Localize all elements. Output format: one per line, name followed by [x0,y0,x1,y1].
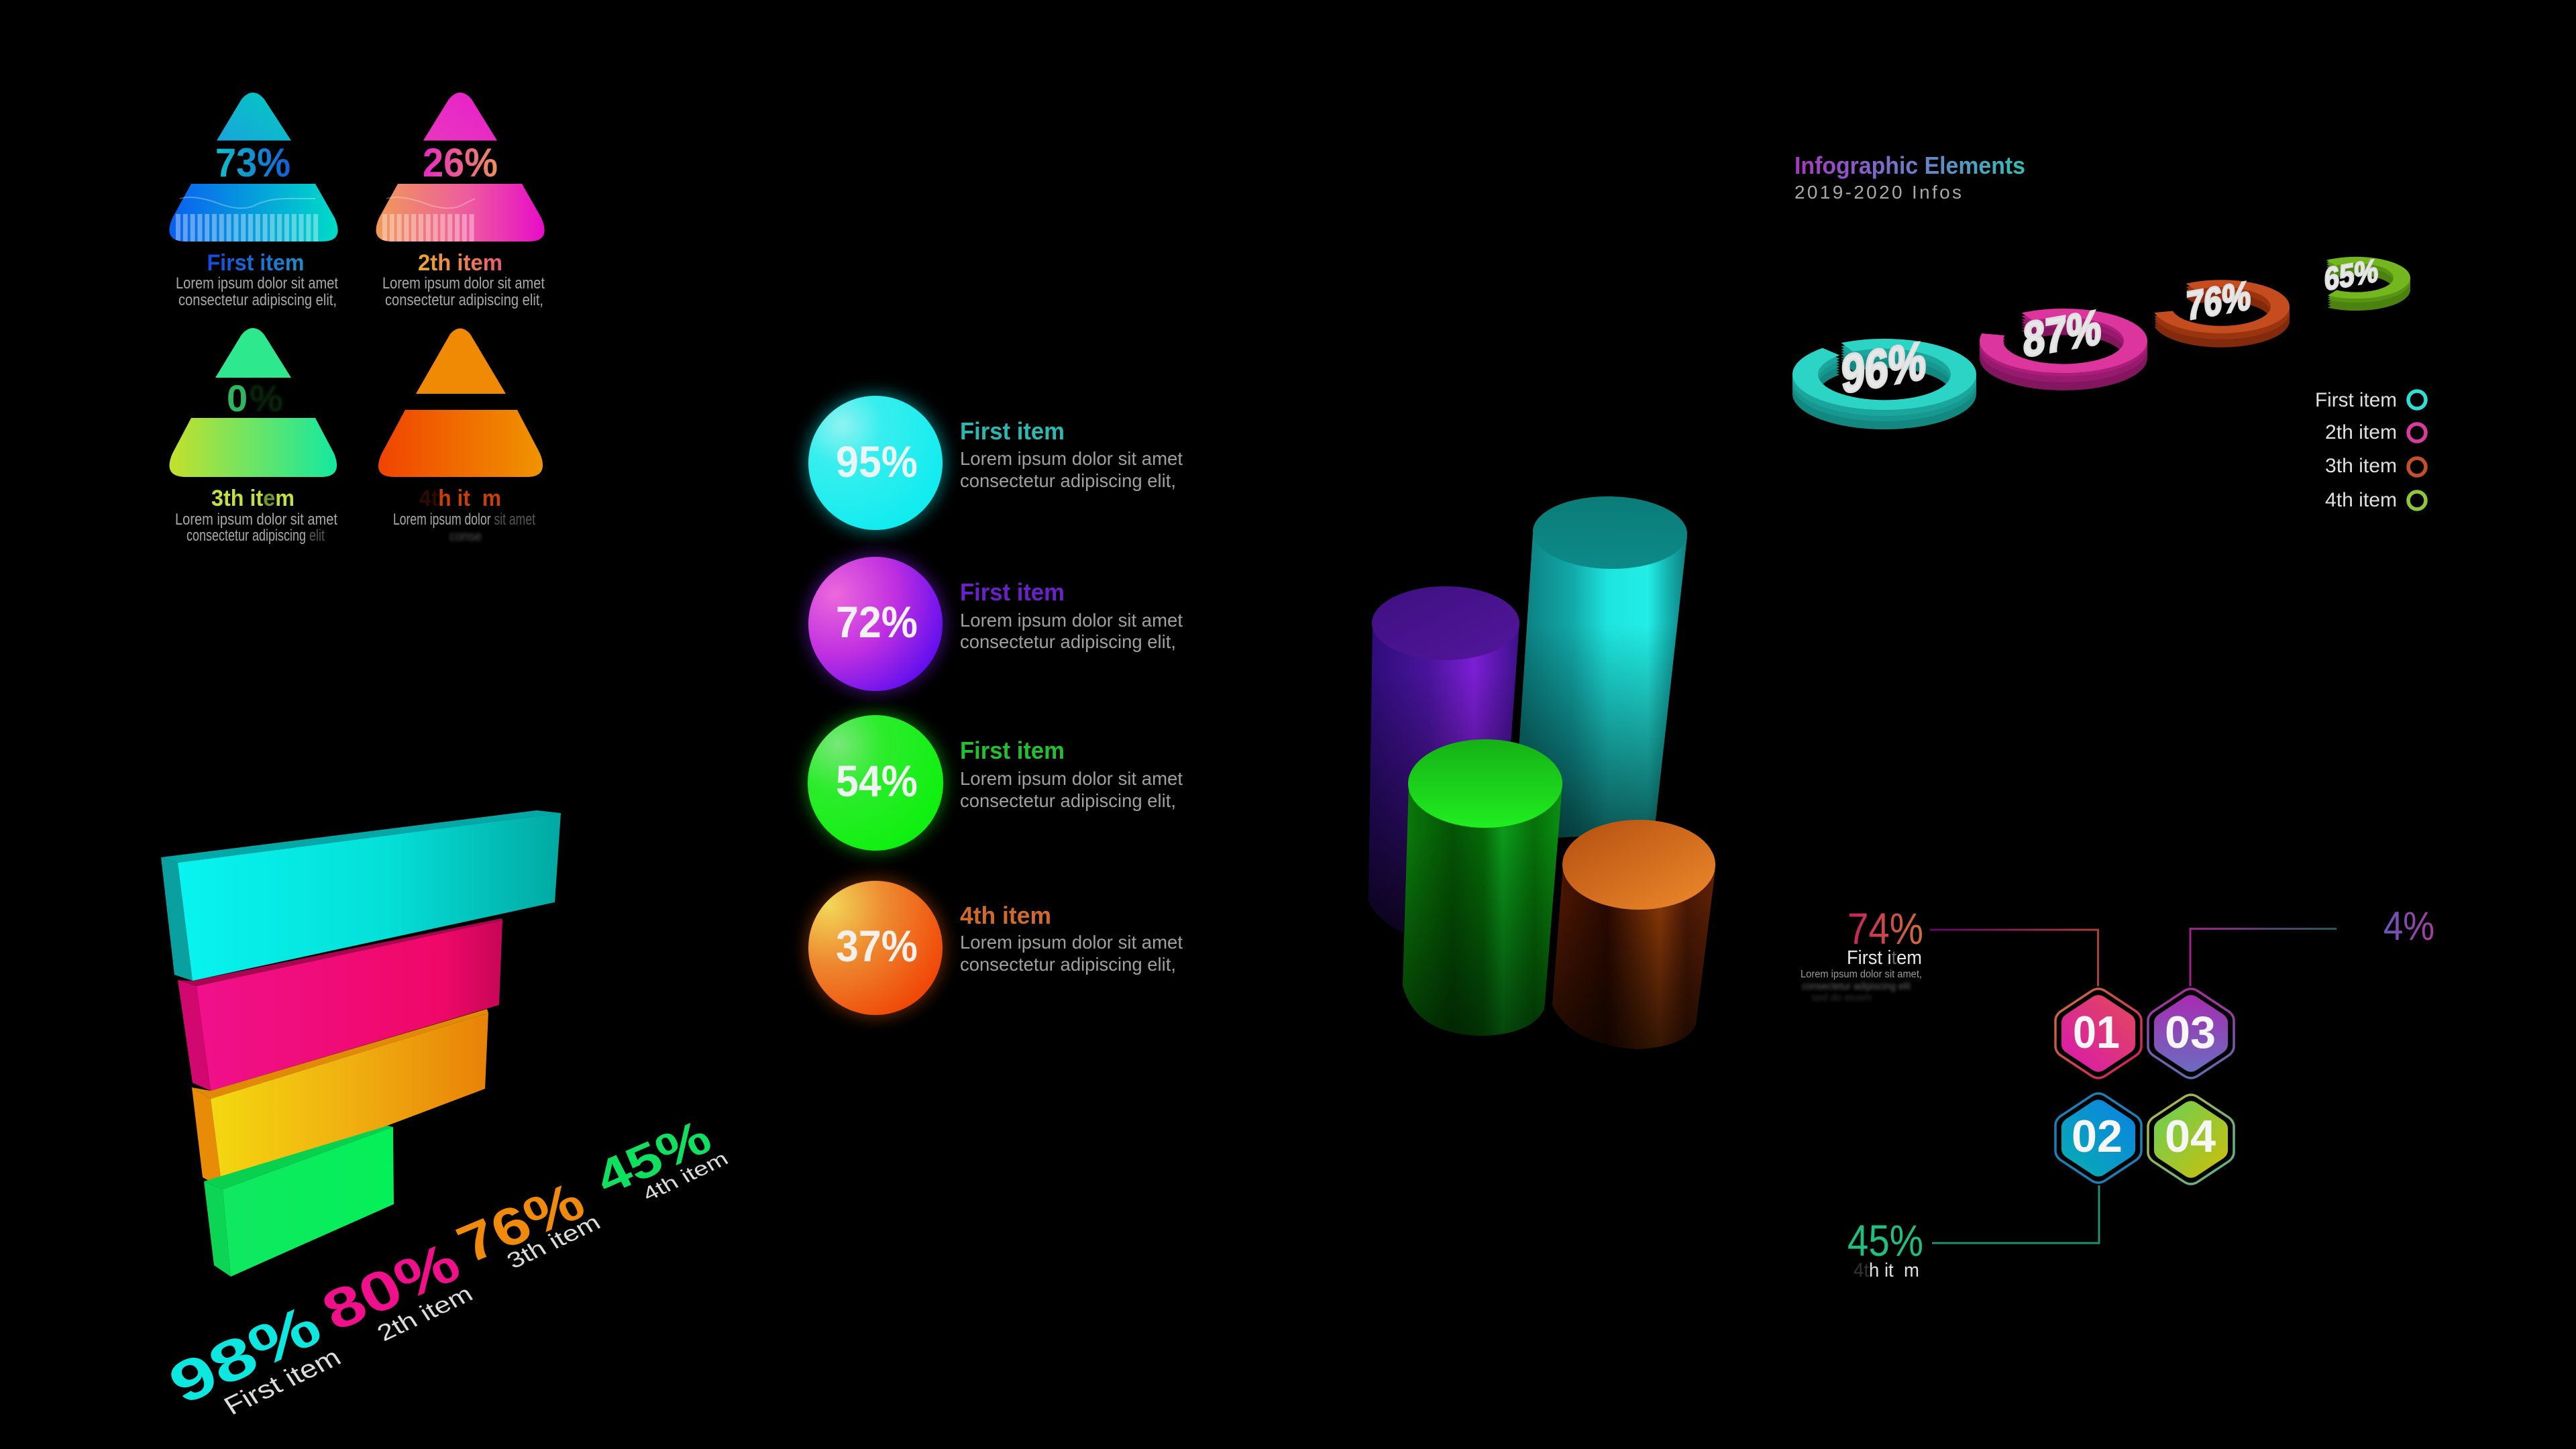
cylinder green [1403,739,1562,1036]
item title: 2th item [418,250,502,276]
ring 76% [2140,272,2302,352]
item description partly faded [393,511,535,544]
item description: Lorem ipsum dolor sit amet [382,274,545,292]
panel: pyramid second item [376,93,545,309]
leader line 03 [2190,928,2337,986]
percentage 73%: 73% [215,140,290,185]
icon: pyramid top [215,328,291,378]
item description [382,274,545,309]
legend [2315,389,2426,511]
bubble row 37%: Lorem ipsum dolor sit amet [960,932,1183,953]
item description partly faded: conse [449,529,482,544]
ring 76%: 76% [2186,272,2251,329]
bubble row 54% [806,713,1183,853]
bar: fourth item green [204,1126,394,1277]
cylinder orange [1552,820,1715,1049]
panel: pyramid fourth item [378,329,543,544]
bar: second item pink [178,918,502,1091]
callout 74% First item: consectetur adipiscing elit [1802,981,1911,992]
bar value: 98% First item: 98% [158,1293,331,1417]
percentage partly faded [227,377,283,419]
item description partly faded: Lorem ipsum dolor sit amet [393,511,535,529]
icon: pyramid top [423,93,497,141]
callout 45% 4th item: 4th item [1854,1260,1919,1281]
panel: numbered hexagons with leaders [1801,904,2434,1281]
bubble row 72%: Lorem ipsum dolor sit amet [960,610,1183,631]
icon: pyramid top [416,329,506,394]
bubble row 72%: First item [960,578,1065,606]
callout 74% First item [1801,904,1923,1004]
bubble row 72%: consectetur adipiscing elit, [960,631,1176,652]
callout 4%: 4% [2383,904,2434,949]
icon: pyramid base [169,418,337,477]
item description [175,511,337,545]
hexagon 03 [2148,989,2234,1078]
bubble row 37%: 37% [836,921,918,971]
item description: consectetur adipiscing elit, [178,291,337,309]
hexagon 01 [2055,989,2141,1078]
leader line 02 [1932,1185,2099,1243]
item description [176,274,338,309]
icon: pyramid top [217,93,291,141]
ring 87% [1965,299,2162,396]
heading [1794,152,2025,203]
hexagon 01: 01 [2073,1007,2120,1058]
bubble row 54%: 54% [836,756,918,806]
bar value: 76% 3th item: 76% [447,1171,594,1274]
subtitle: 2019-2020 Infos [1794,182,1962,203]
legend row 3th item: 3th item [2325,455,2397,477]
bubble row 54%: First item [960,737,1065,764]
bubble row 95%: consectetur adipiscing elit, [960,470,1176,491]
panel: pyramid first item [169,93,338,309]
callout 74% First item: Lorem ipsum dolor sit amet, [1801,969,1922,980]
title: Infographic Elements [1794,152,2025,179]
percentage partly faded: % [250,377,283,419]
item description: consectetur adipiscing elit [186,527,325,545]
panel: percentage bubbles list [806,393,1183,1018]
bar value: 80% 2th item [312,1230,478,1346]
bubble row 37%: 4th item [960,902,1051,929]
hexagon 02: 02 [2072,1111,2123,1162]
bubble row 95%: Lorem ipsum dolor sit amet [960,448,1183,469]
ring 96% [1777,330,1992,435]
item title: First item [207,250,305,276]
legend row 4th item: 4th item [2325,489,2397,511]
bar value: 76% 3th item: 3th item [502,1210,605,1274]
bubble row 95%: 95% [836,437,918,486]
bubble row 37% [806,878,1183,1018]
hexagon 04: 04 [2165,1111,2216,1162]
bubble row 72% [806,554,1183,694]
percentage 26%: 26% [423,140,498,185]
leader line 01 [1930,930,2098,986]
chart: 3D cylinders [1368,495,1715,1049]
callout 45% 4th item [1847,1216,1923,1281]
item title: 3th item [211,486,294,511]
bar value: 80% 2th item: 80% [312,1230,470,1342]
bubble row 37%: consectetur adipiscing elit, [960,954,1176,975]
icon: pyramid base with stripes [169,184,338,242]
legend row first item: First item [2315,389,2397,411]
hexagon 04 [2148,1095,2234,1184]
bar value: 98% First item [158,1293,346,1421]
legend row 2th item: 2th item [2325,421,2397,443]
callout 74% First item: 74% [1847,904,1923,953]
cylinder cyan [1517,495,1688,839]
bar: first item cyan [161,810,561,981]
cylinder purple [1368,586,1519,932]
bar value: 80% 2th item: 2th item [372,1281,478,1346]
item title partly faded: 4th item [419,486,501,511]
icon: pyramid base with stripes [376,184,545,242]
bubble row 54%: consectetur adipiscing elit, [960,790,1176,811]
panel: 3D stepped bar chart [158,810,733,1421]
hexagon 03: 03 [2165,1007,2216,1058]
callout 45% 4th item: 45% [1847,1216,1923,1265]
percentage partly faded: 0 [227,377,248,419]
item description: consectetur adipiscing elit, [385,291,543,309]
item description: Lorem ipsum dolor sit amet [175,511,337,529]
bar value: 98% First item: First item [219,1343,346,1421]
bar value: 45% 4th item: 45% [587,1110,720,1205]
item description: Lorem ipsum dolor sit amet [176,274,338,292]
panel: 3D percentage rings [1777,253,2420,435]
bubble row 72%: 72% [836,597,918,647]
callout 74% First item: First item [1847,947,1922,969]
icon: pyramid base [378,410,543,477]
ring 65%: 65% [2324,253,2378,298]
panel: pyramid third item [169,328,337,545]
bubble row 95% [806,393,1183,533]
bar: third item orange [192,1009,488,1188]
bubble row 54%: Lorem ipsum dolor sit amet [960,768,1183,789]
ring 65% [2292,253,2420,314]
callout 74% First item: sed do eiusm [1811,992,1872,1004]
bar value: 45% 4th item: 4th item [639,1148,733,1205]
ring 96%: 96% [1841,330,1926,405]
hexagon 02 [2055,1093,2141,1183]
ring 87%: 87% [2023,299,2101,367]
bubble row 95%: First item [960,417,1065,445]
